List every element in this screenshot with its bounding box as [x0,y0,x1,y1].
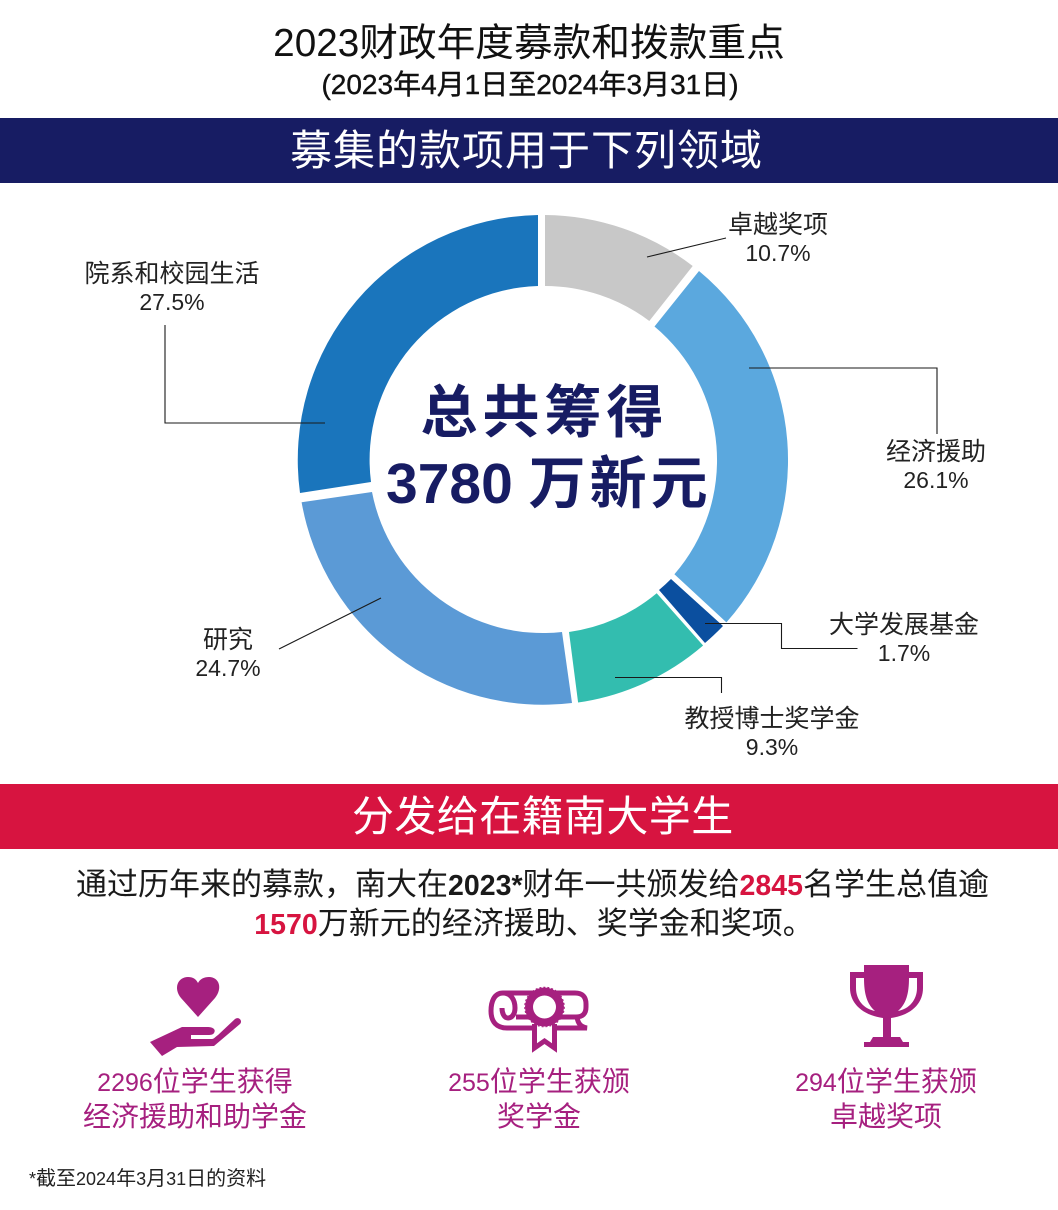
segment: research 24.7% [302,492,572,705]
label: research: 24.7% [195,655,261,681]
label: financial aid [886,438,986,493]
heading band: disbursed to students: 分发给在籍南大学生 [352,793,734,840]
donut center: amount: 3780 万新元 [386,452,712,516]
label: professorships and scholarships: 教授博士奖学金 [684,705,860,733]
disbursement summary text: 通过历年来的募款，南大在2023*财年一共颁发给2845名学生总值逾 [76,867,989,902]
label: university development fund: 大学发展基金 [829,611,979,639]
title: 2023财政年度募款和拨款重点 [273,22,785,64]
label: excellence awards: 卓越奖项 [728,211,828,239]
caption: financial aid recipients [83,1066,307,1132]
footnote: *截至2024年3月31日的资料 [29,1168,266,1190]
label: excellence awards: 10.7% [745,240,811,266]
caption: scholarship recipients [448,1066,630,1132]
caption: excellence award recipients: 卓越奖项 [830,1101,942,1132]
caption: scholarship recipients: 奖学金 [497,1101,581,1132]
segment: financial aid 26.1% [654,271,788,622]
segment: excellence awards 10.7% [545,215,693,321]
heading band: funds raised [0,118,1058,183]
segment: professorships and scholarships 9.3% [569,593,703,702]
label: professorships and scholarships [684,705,860,760]
segment: schools and campus life 27.5% [298,215,538,493]
caption: scholarship recipients: 255位学生获颁 [448,1066,630,1097]
label: research: 研究 [203,626,253,654]
heading band: funds raised: 募集的款项用于下列领域 [290,127,763,174]
label: university development fund: 1.7% [878,640,930,666]
disbursement summary text [76,867,989,941]
caption: financial aid recipients: 2296位学生获得 [97,1066,293,1097]
label: schools and campus life: 院系和校园生活 [84,260,260,288]
label: research [195,626,261,681]
label: financial aid: 26.1% [903,467,969,493]
label: excellence awards [728,211,828,266]
donut center: total raised: 总共筹得 [420,380,668,444]
segment: university development fund 1.7% [659,579,723,643]
label: professorships and scholarships: 9.3% [746,734,798,760]
label: schools and campus life: 27.5% [139,289,205,315]
label: financial aid: 经济援助 [886,438,986,466]
date range subtitle: (2023年4月1日至2024年3月31日) [321,68,739,100]
label: schools and campus life [84,260,260,315]
disbursement summary text: 1570万新元的经济援助、奖学金和奖项。 [254,906,814,941]
caption: excellence award recipients [795,1066,977,1132]
caption: excellence award recipients: 294位学生获颁 [795,1066,977,1097]
caption: financial aid recipients: 经济援助和助学金 [83,1101,307,1132]
label: university development fund [829,611,979,666]
heading band: disbursed to students [0,784,1058,849]
